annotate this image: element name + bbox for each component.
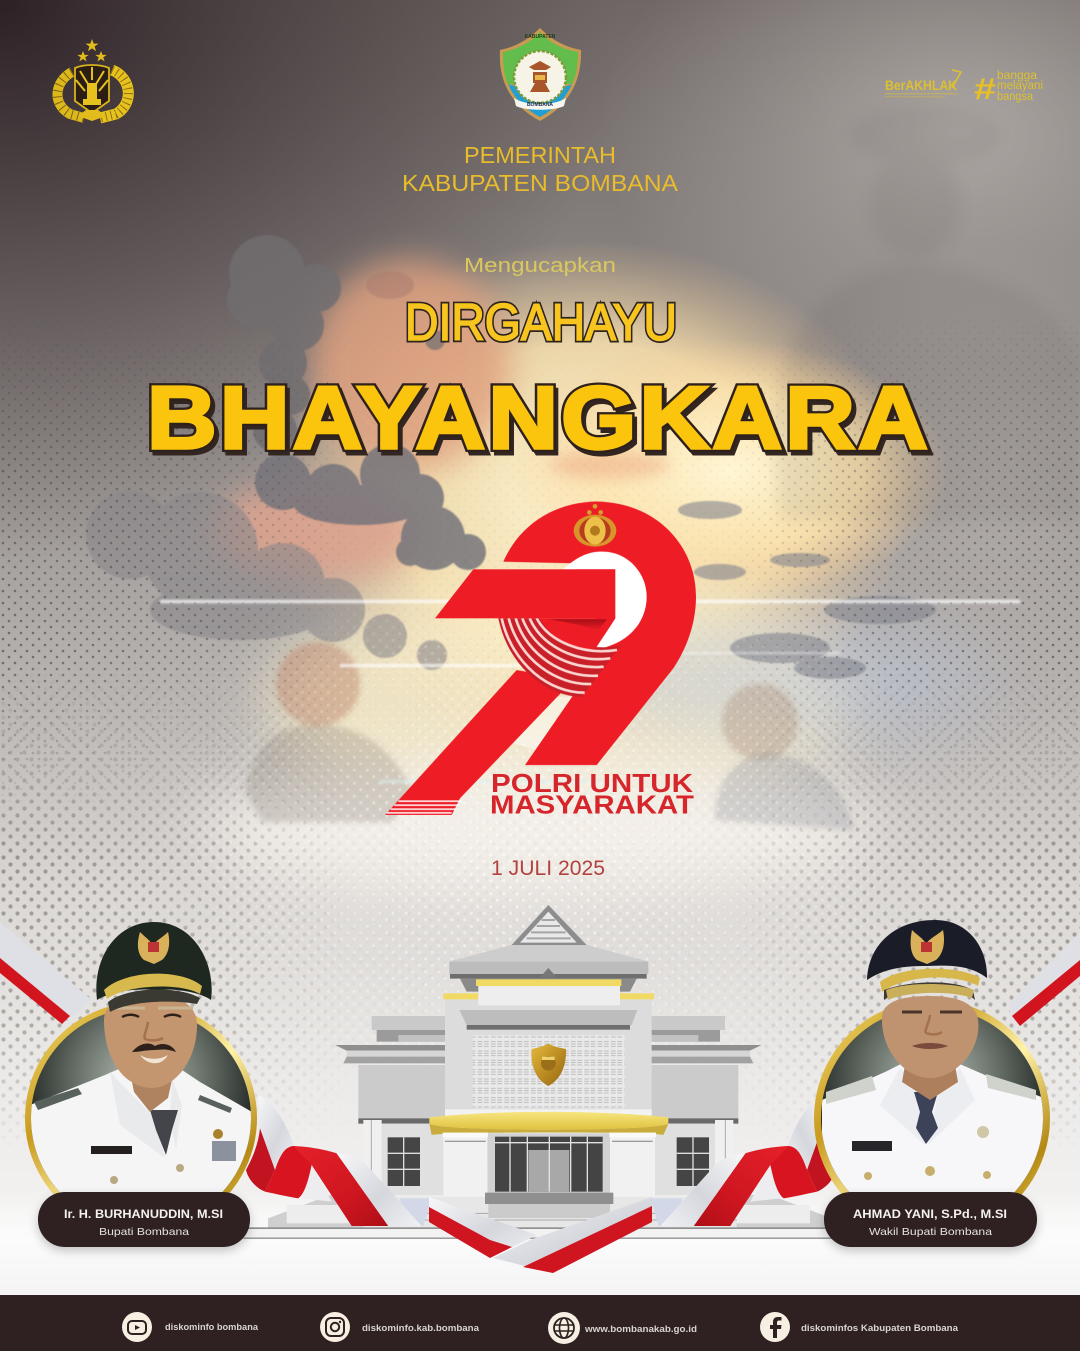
logo: Kabupaten Bombana shield: BOMBANA (527, 102, 553, 108)
text: Mengucapkan: Mengucapkan (464, 255, 616, 277)
logo: HUT ke-79 Polri (385, 502, 696, 820)
title: BHAYANGKARA: BHAYANGKARA (147, 368, 931, 467)
cap (96, 922, 212, 1000)
portrait: Bupati (25, 922, 257, 1194)
name pill: Bupati (38, 1192, 250, 1251)
ribbon lower centre (429, 1197, 652, 1273)
moustache (132, 1044, 176, 1052)
floor (0, 1190, 1080, 1295)
heading: government name: KABUPATEN BOMBANA (402, 170, 679, 196)
uniform (822, 1064, 1043, 1192)
faded soldier silhouettes (245, 642, 855, 830)
heading: government name: PEMERINTAH (464, 142, 616, 168)
pale gap between seven and nine (513, 697, 575, 750)
neck (902, 1065, 958, 1100)
name pill: Bupati: Ir. H. BURHANUDDIN, M.SI (64, 1207, 223, 1221)
light streaks (160, 600, 1020, 783)
logos: BerAKHLAK and bangga melayani bangsa: bangga (997, 70, 1038, 82)
text: date: 1 JULI 2025 (491, 857, 605, 880)
logo: Kabupaten Bombana shield (500, 28, 581, 121)
seven bar (435, 569, 615, 618)
nine body (503, 502, 696, 765)
eyes and nose (122, 1015, 181, 1017)
text: website: www.bombanakab.go.id (584, 1324, 697, 1335)
right wing (650, 1016, 762, 1197)
text: facebook: diskominfos Kabupaten Bombana (801, 1323, 959, 1334)
name pill: Wakil Bupati: Wakil Bupati Bombana (869, 1226, 992, 1238)
logos: BerAKHLAK and bangga melayani bangsa: melayani (997, 80, 1043, 92)
ribbon lower left (246, 1095, 432, 1226)
icon: youtube (122, 1312, 152, 1342)
icon: website (548, 1312, 580, 1344)
seven stem (385, 670, 573, 815)
striped ring (498, 618, 621, 697)
logos: BerAKHLAK and bangga melayani bangsa (885, 70, 1043, 106)
face (104, 995, 197, 1088)
icon: facebook (760, 1312, 790, 1342)
text: instagram: diskominfo.kab.bombana (362, 1323, 480, 1334)
title: DIRGAHAYU: DIRGAHAYU (405, 294, 677, 352)
ribbon upper left (0, 922, 92, 1024)
portrait: Wakil Bupati (814, 920, 1050, 1195)
icon: instagram (320, 1312, 350, 1342)
clouds and smoke (86, 235, 936, 679)
heading: government name (402, 142, 679, 196)
logos: BerAKHLAK and bangga melayani bangsa: bangsa (997, 91, 1034, 103)
title: BHAYANGKARA: BHAYANGKARA (150, 372, 934, 471)
left steps (268, 1195, 370, 1228)
right steps (727, 1195, 832, 1228)
logo: HUT ke-79 Polri: POLRI UNTUK (491, 768, 693, 798)
faded officer silhouette top right (770, 105, 1080, 520)
name pill: Wakil Bupati (824, 1192, 1037, 1251)
mini police emblem (574, 504, 616, 547)
face (882, 996, 978, 1078)
central tower (512, 905, 587, 945)
ribbon lower right (650, 1095, 836, 1226)
logo: Kabupaten Bombana shield: KABUPATEN (525, 34, 556, 40)
left wing (335, 1016, 447, 1197)
badge (531, 1043, 566, 1086)
text: youtube: diskominfo bombana (165, 1322, 259, 1333)
title: DIRGAHAYU: DIRGAHAYU (405, 294, 677, 352)
glasses (110, 1006, 193, 1010)
uniform (31, 1069, 251, 1192)
logo: HUT ke-79 Polri: MASYARAKAT (490, 790, 694, 820)
name pill: Wakil Bupati: AHMAD YANI, S.Pd., M.SI (853, 1207, 1007, 1221)
warm sky glow (200, 240, 990, 900)
building (243, 905, 860, 1239)
cap (867, 920, 987, 980)
ribbon upper right (1010, 932, 1080, 1026)
footer bar (0, 1295, 1080, 1351)
logos: BerAKHLAK and bangga melayani bangsa: # (974, 73, 996, 106)
title: BHAYANGKARA: BHAYANGKARA (147, 368, 931, 467)
neck (128, 1062, 176, 1112)
name pill: Bupati: Bupati Bombana (99, 1226, 189, 1238)
logo: police emblem top left (57, 39, 128, 121)
halftone dots (0, 310, 1080, 1150)
eyes and nose (902, 1010, 962, 1014)
logos: BerAKHLAK and bangga melayani bangsa: BerAKHLAK (885, 77, 957, 93)
